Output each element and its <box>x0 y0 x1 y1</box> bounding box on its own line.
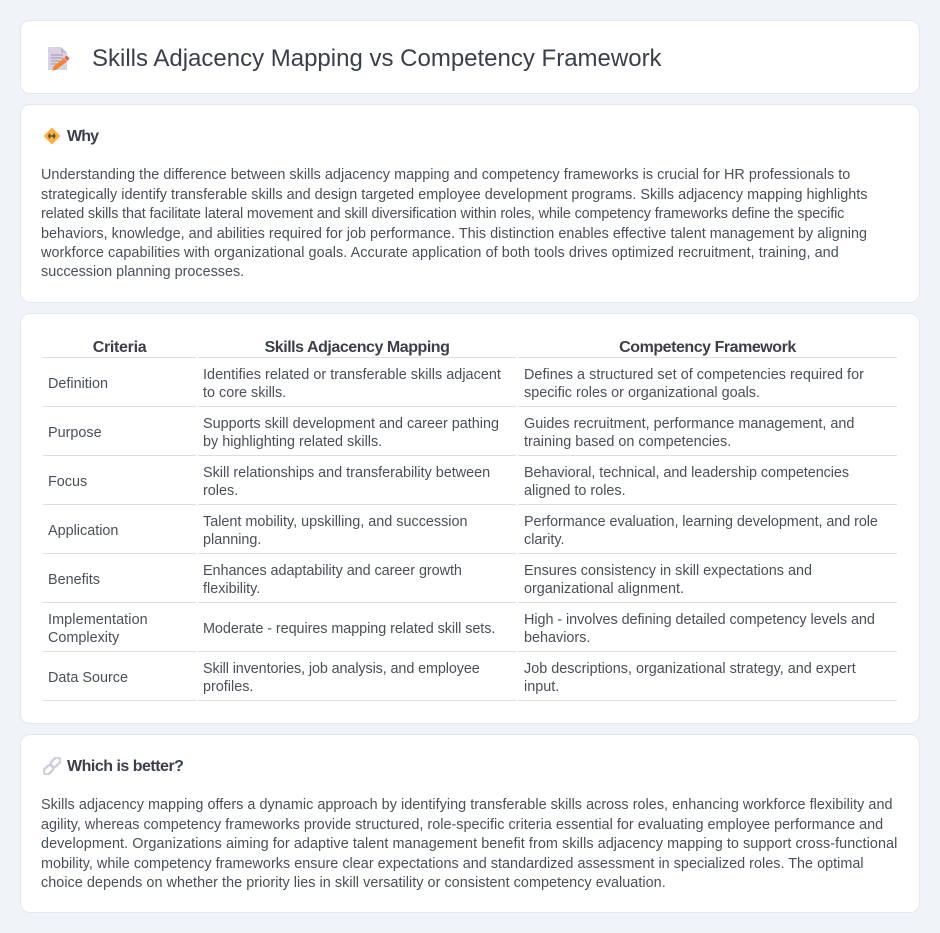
text block: why: strategically identify transferable skills and design targeted employee development programs. Skills adjacency mapping highlights <box>41 186 868 202</box>
text block: why <box>41 167 868 280</box>
row: focus: aligned to roles. <box>524 483 626 499</box>
row: data source: Skill inventories, job analysis, and employee <box>203 661 480 677</box>
row: data source: profiles. <box>203 679 253 695</box>
row: benefits: Enhances adaptability and career growth <box>203 563 462 579</box>
row: application: Talent mobility, upskilling, and succession <box>203 514 468 530</box>
row: definition: to core skills. <box>203 385 286 401</box>
table header: skills adjacency mapping: Skills Adjacency Mapping <box>265 339 449 356</box>
text block: which is better <box>41 797 897 891</box>
icon: diamond warning <box>44 128 60 144</box>
row: benefits: Ensures consistency in skill expectations and <box>524 563 812 579</box>
text block: why: succession planning processes. <box>41 264 244 280</box>
panel: why <box>20 104 920 303</box>
row: definition: Defines a structured set of competencies required for <box>524 367 864 383</box>
text block: why: workforce capabilities with organizational goals. Accurate application of both tools drives optimized recruitment, training, and <box>41 245 839 261</box>
row: application <box>48 514 878 548</box>
row: purpose: Purpose <box>48 425 102 441</box>
text block: why: Understanding the difference between skills adjacency mapping and competency frameworks is crucial for HR professionals to <box>41 167 850 183</box>
heading: why: Why <box>67 128 98 145</box>
row: purpose <box>48 416 854 450</box>
row: application: planning. <box>203 532 261 548</box>
text block: which is better: development. Organizations aiming for adaptive talent management benefit from skills adjacency mapping to support cross-functional <box>41 836 897 852</box>
row: focus: Focus <box>48 474 87 490</box>
icon: link <box>43 757 61 775</box>
row: data source: Data Source <box>48 670 128 686</box>
row: definition: specific roles or organizational goals. <box>524 385 760 401</box>
row: definition: Identifies related or transferable skills adjacent <box>203 367 501 383</box>
heading: which is better: Which is better? <box>67 758 183 775</box>
row: benefits <box>48 563 812 597</box>
row: application: clarity. <box>524 532 565 548</box>
row: focus <box>48 465 849 499</box>
row: definition <box>48 367 864 401</box>
row: purpose: by highlighting related skills. <box>203 434 382 450</box>
text block: which is better: Skills adjacency mapping offers a dynamic approach by identifying transferable skills across roles, enhancing workforce flexibility and <box>41 797 893 813</box>
text block: why: behaviors, knowledge, and abilities required for job performance. This distinction enables effective talent management by aligning <box>41 226 867 242</box>
row: data source: Job descriptions, organizational strategy, and expert <box>524 661 856 677</box>
row: implementation complexity: Implementation <box>48 612 148 628</box>
row: purpose: Guides recruitment, performance management, and <box>524 416 854 432</box>
row: implementation complexity: High - involves defining detailed competency levels and <box>524 612 875 628</box>
title: Skills Adjacency Mapping vs Competency Framework <box>92 45 662 72</box>
row: benefits: Benefits <box>48 572 100 588</box>
panel: which is better <box>20 734 920 913</box>
row: benefits: flexibility. <box>203 581 260 597</box>
row: data source <box>48 661 856 695</box>
table header: competency framework: Competency Framework <box>619 339 796 356</box>
row: focus: roles. <box>203 483 238 499</box>
text block: which is better: choice depends on whether the priority lies in skill versatility or consistent competency evaluation. <box>41 875 666 891</box>
row: implementation complexity: Moderate - requires mapping related skill sets. <box>203 621 495 637</box>
table header: criteria: Criteria <box>93 339 146 356</box>
text block: which is better: mobility, while competency frameworks ensure clear expectations and standardized assessment in specialized roles. The optimal <box>41 856 864 872</box>
row: data source: input. <box>524 679 559 695</box>
row: implementation complexity: Complexity <box>48 630 119 646</box>
row: purpose: training based on competencies. <box>524 434 731 450</box>
row: focus: Behavioral, technical, and leadership competencies <box>524 465 849 481</box>
row: application: Application <box>48 523 118 539</box>
row: implementation complexity: behaviors. <box>524 630 590 646</box>
panel: header <box>20 20 920 94</box>
icon: document with pencil <box>48 47 70 70</box>
row: benefits: organizational alignment. <box>524 581 684 597</box>
row: definition: Definition <box>48 376 108 392</box>
row: focus: Skill relationships and transferability between <box>203 465 490 481</box>
row: implementation complexity <box>48 612 875 646</box>
text block: why: related skills that facilitate lateral movement and skill diversification within roles, while competency frameworks define the specific <box>41 206 844 222</box>
text block: which is better: agility, whereas competency frameworks provide structured, role-specific criteria essential for evaluating employee performance and <box>41 816 883 832</box>
panel: comparison table <box>20 313 920 724</box>
row: application: Performance evaluation, learning development, and role <box>524 514 878 530</box>
row: purpose: Supports skill development and career pathing <box>203 416 499 432</box>
